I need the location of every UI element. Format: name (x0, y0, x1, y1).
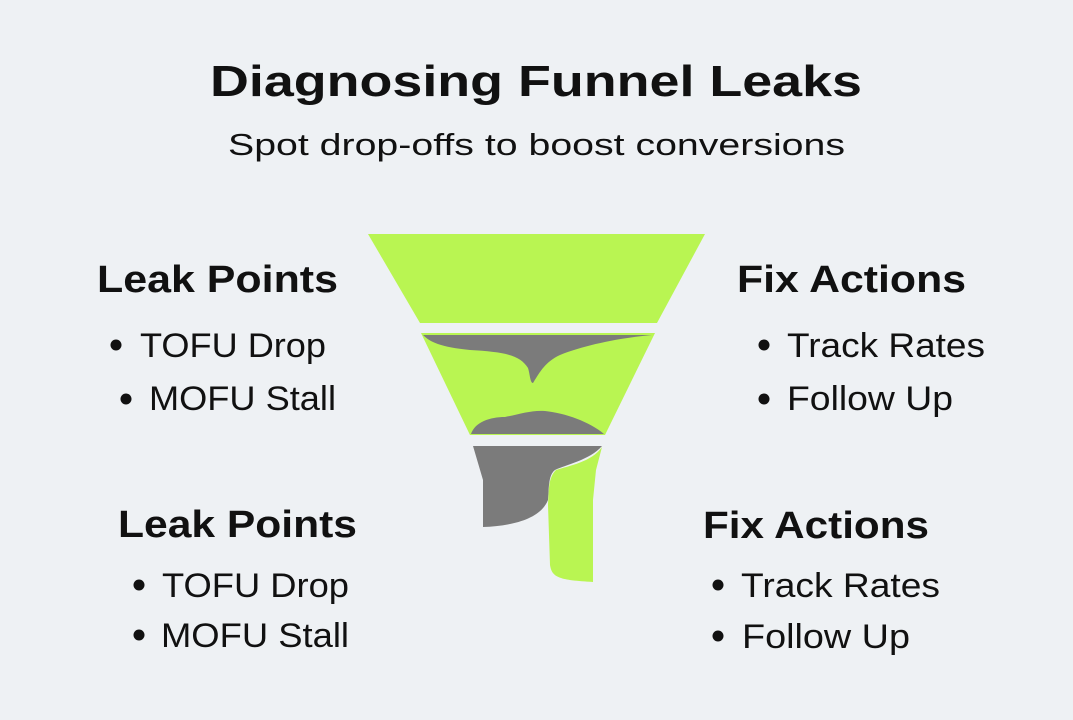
panel: leak points top (97, 259, 338, 418)
heading: Fix Actions (703, 505, 929, 547)
bullet: Follow Up (742, 618, 910, 656)
panel: fix actions bottom (703, 505, 940, 656)
bullet: TOFU Drop (162, 567, 349, 605)
panel: leak points bottom (118, 504, 357, 655)
heading: Fix Actions (737, 259, 966, 301)
bullet: MOFU Stall (161, 617, 349, 655)
funnel (368, 234, 705, 582)
panel: fix actions top (737, 259, 985, 418)
funnel middle band (421, 333, 655, 435)
funnel bottom band (473, 446, 602, 582)
funnel top band (368, 234, 705, 323)
subtitle: Spot drop-offs to boost conversions (228, 127, 845, 162)
heading: Leak Points (97, 259, 338, 301)
bullet: Track Rates (741, 567, 940, 605)
title: Diagnosing Funnel Leaks (210, 57, 862, 106)
heading: Leak Points (118, 504, 357, 546)
bullet: Follow Up (787, 380, 953, 418)
bullet: TOFU Drop (140, 327, 326, 365)
bullet: MOFU Stall (149, 380, 336, 418)
bullet: Track Rates (787, 327, 985, 365)
